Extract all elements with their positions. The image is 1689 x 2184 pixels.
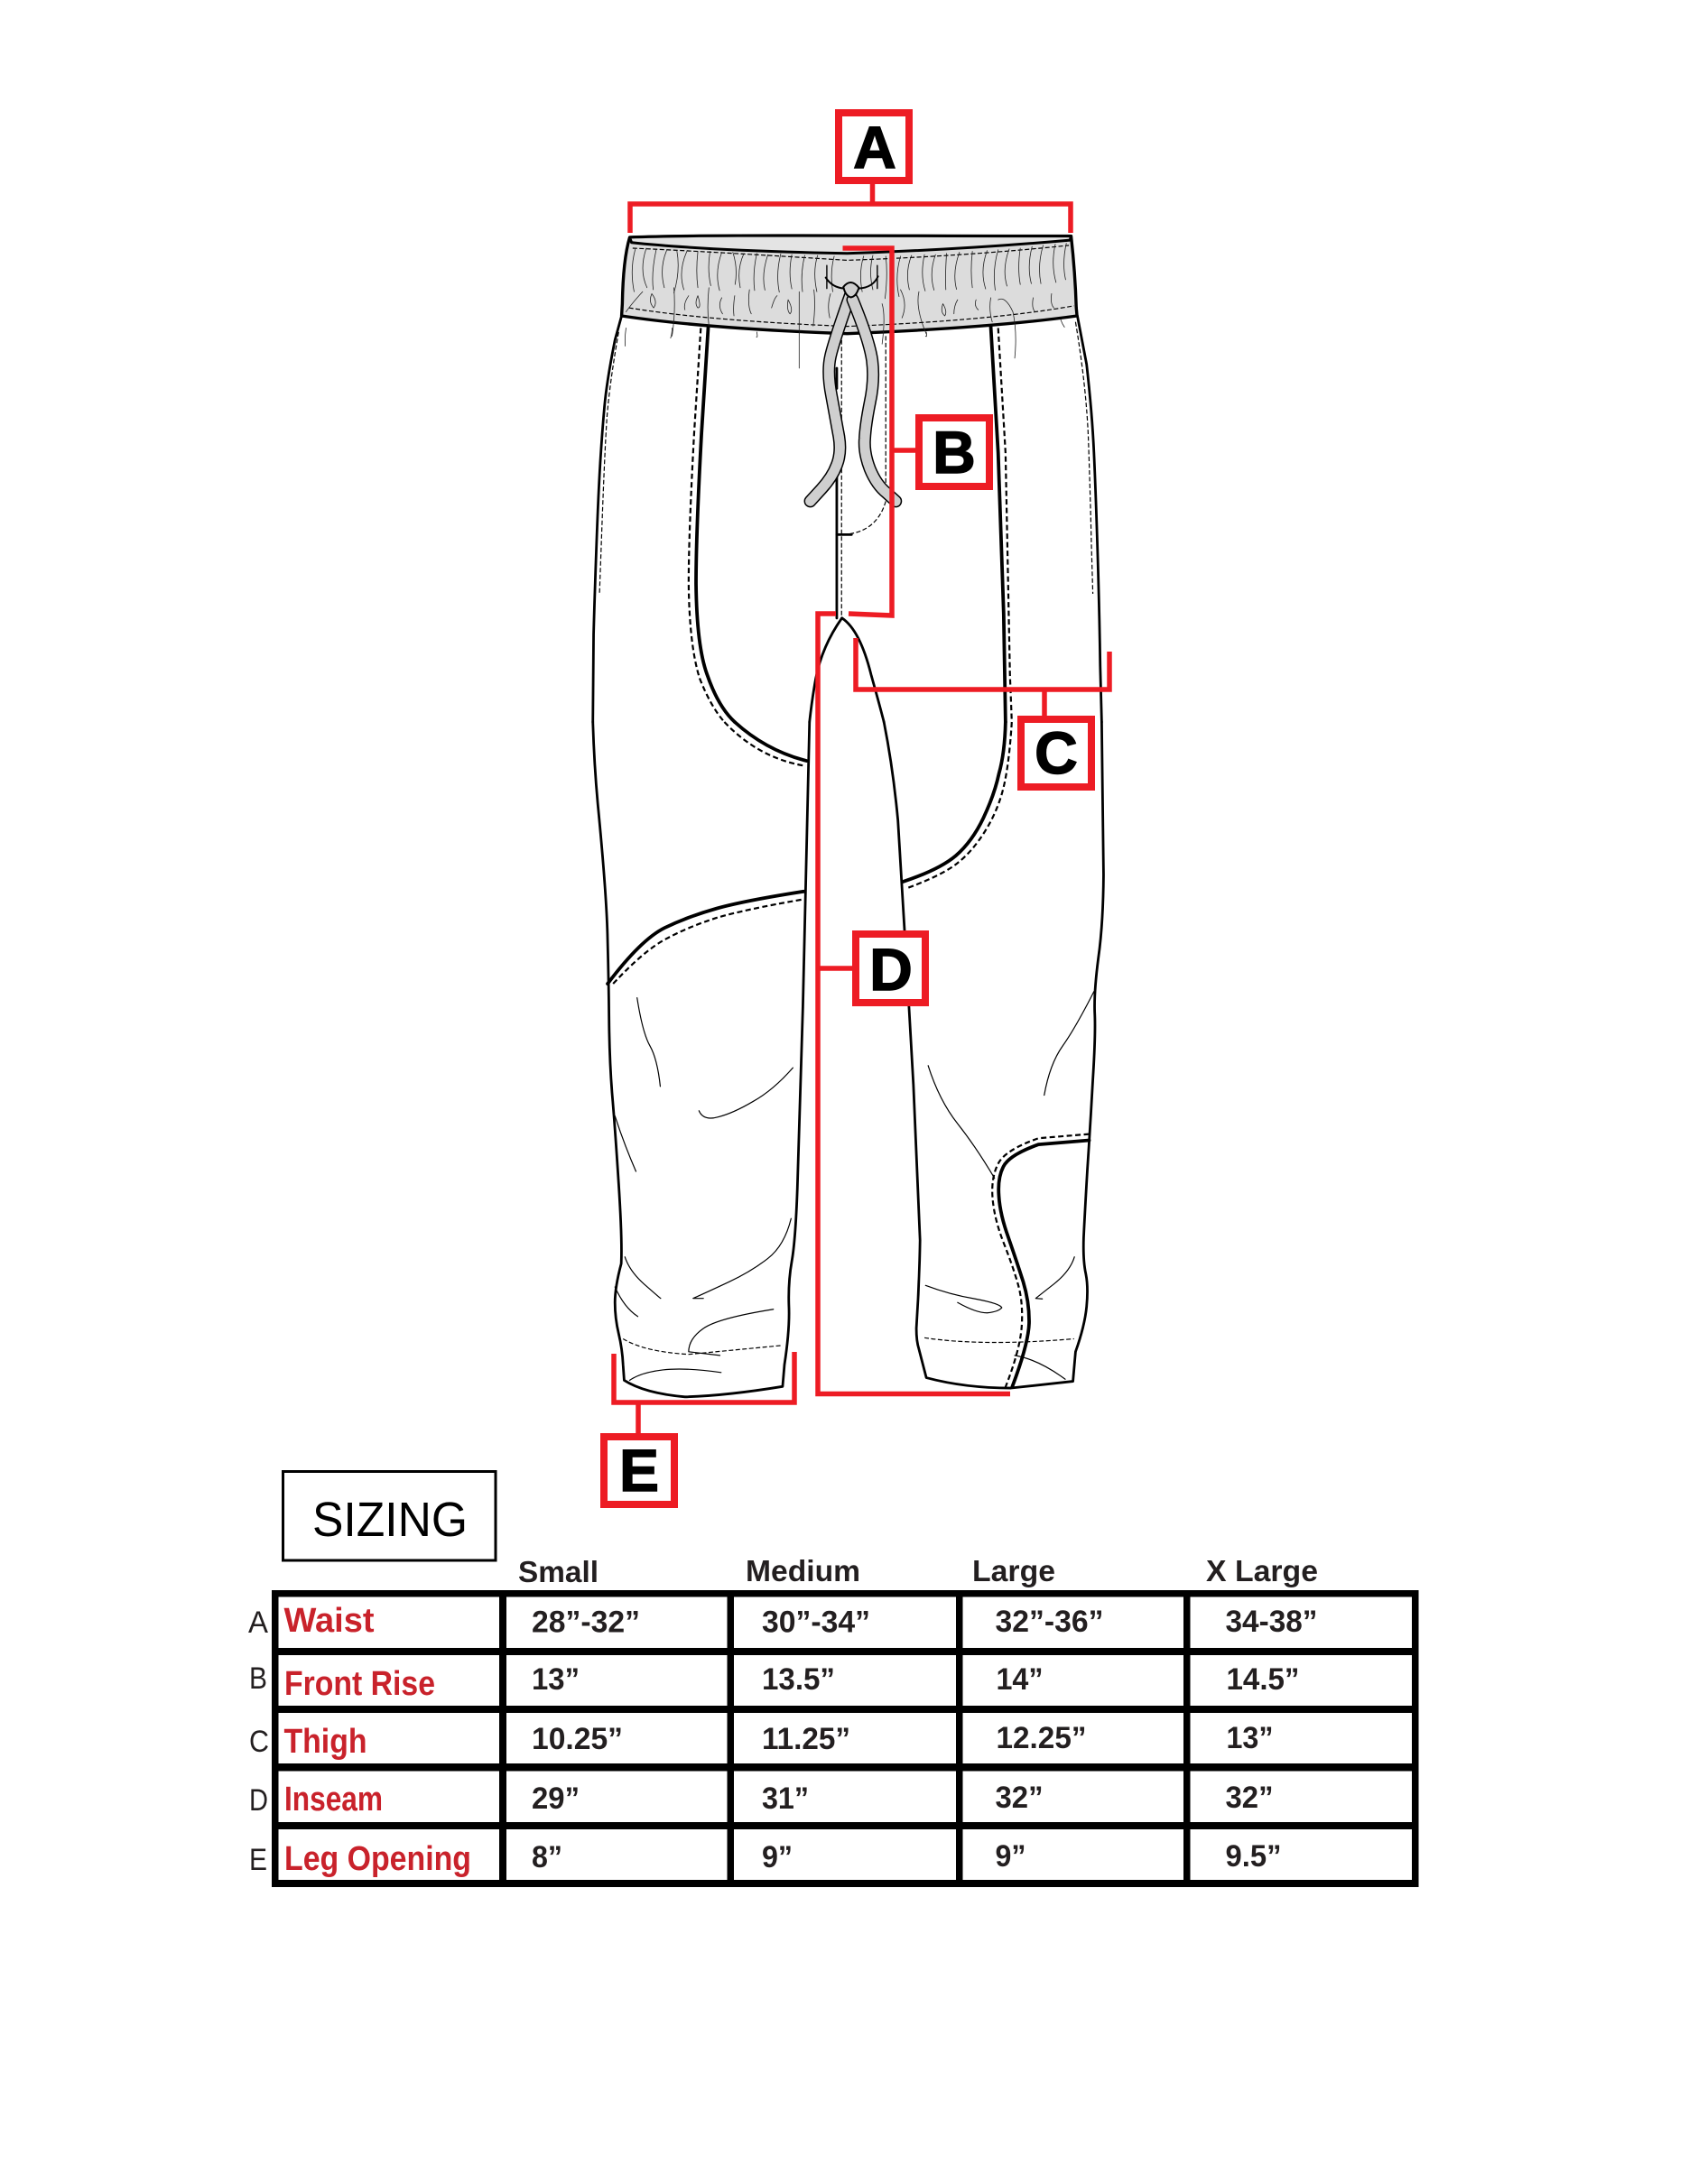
medium size values: 30”-34” [762, 1605, 870, 1639]
x large size values: 32” [1226, 1781, 1273, 1815]
measurement B: front rise: B [933, 419, 976, 486]
row key letters: C [249, 1725, 269, 1759]
large size values: 12.25” [997, 1721, 1087, 1755]
small size values: 13” [532, 1662, 580, 1697]
large size values [995, 1605, 1103, 1874]
measurement names: Leg Opening [284, 1840, 471, 1878]
medium size values: 13.5” [762, 1662, 835, 1697]
small size values: 29” [532, 1781, 580, 1816]
x large size values [1226, 1605, 1318, 1874]
sizing title box [283, 1471, 496, 1560]
x large size values: 13” [1226, 1721, 1273, 1755]
x large size values: 14.5” [1226, 1662, 1300, 1697]
row key letters [248, 1606, 269, 1877]
large size values: 14” [997, 1662, 1044, 1697]
large size values: 9” [995, 1839, 1025, 1874]
drawstring [811, 265, 896, 501]
measurement names: Thigh [283, 1723, 367, 1761]
measurement C: thigh [856, 638, 1109, 787]
row key letters: A [248, 1606, 268, 1640]
small size values: 28”-32” [532, 1605, 640, 1639]
measurement A: waist: A [853, 114, 896, 180]
small size values [532, 1605, 640, 1874]
x large size values: 9.5” [1226, 1839, 1282, 1874]
small size values: 8” [532, 1840, 562, 1874]
size column headings: Large [972, 1554, 1055, 1587]
x large size values: 34-38” [1226, 1605, 1318, 1639]
medium size values: 31” [762, 1781, 809, 1816]
row key letters: B [249, 1661, 267, 1696]
small size values: 10.25” [532, 1722, 623, 1756]
medium size values [762, 1605, 870, 1874]
large size values: 32”-36” [995, 1605, 1103, 1639]
measurement A: waist [630, 113, 1071, 233]
measurement E: leg opening: E [619, 1437, 659, 1504]
row key letters: E [249, 1843, 267, 1877]
lower garment outline and seams [593, 722, 1103, 1397]
sizing title box: SIZING [312, 1493, 468, 1547]
measurement D: inseam [818, 614, 1010, 1393]
medium size values: 9” [762, 1840, 793, 1874]
measurement B: front rise [843, 248, 989, 615]
measurement names: Waist [283, 1602, 375, 1640]
waistband [622, 236, 1077, 368]
measurement names: Front Rise [284, 1665, 435, 1703]
upper garment outline and seams [593, 316, 1101, 722]
sizing table grid [272, 1590, 1419, 1887]
measurement E: leg opening [604, 1352, 794, 1504]
measurement C: thigh: C [1035, 719, 1078, 786]
measurement names: Inseam [284, 1781, 383, 1818]
measurement D: inseam: D [869, 936, 913, 1003]
size column headings: Medium [746, 1554, 860, 1587]
pants technical drawing [593, 236, 1103, 1397]
large size values: 32” [995, 1781, 1044, 1815]
row key letters: D [249, 1783, 268, 1818]
size column headings [518, 1554, 1318, 1588]
measurement names [283, 1602, 471, 1878]
size column headings: Small [518, 1555, 599, 1588]
size column headings: X Large [1206, 1554, 1318, 1587]
medium size values: 11.25” [762, 1722, 850, 1756]
